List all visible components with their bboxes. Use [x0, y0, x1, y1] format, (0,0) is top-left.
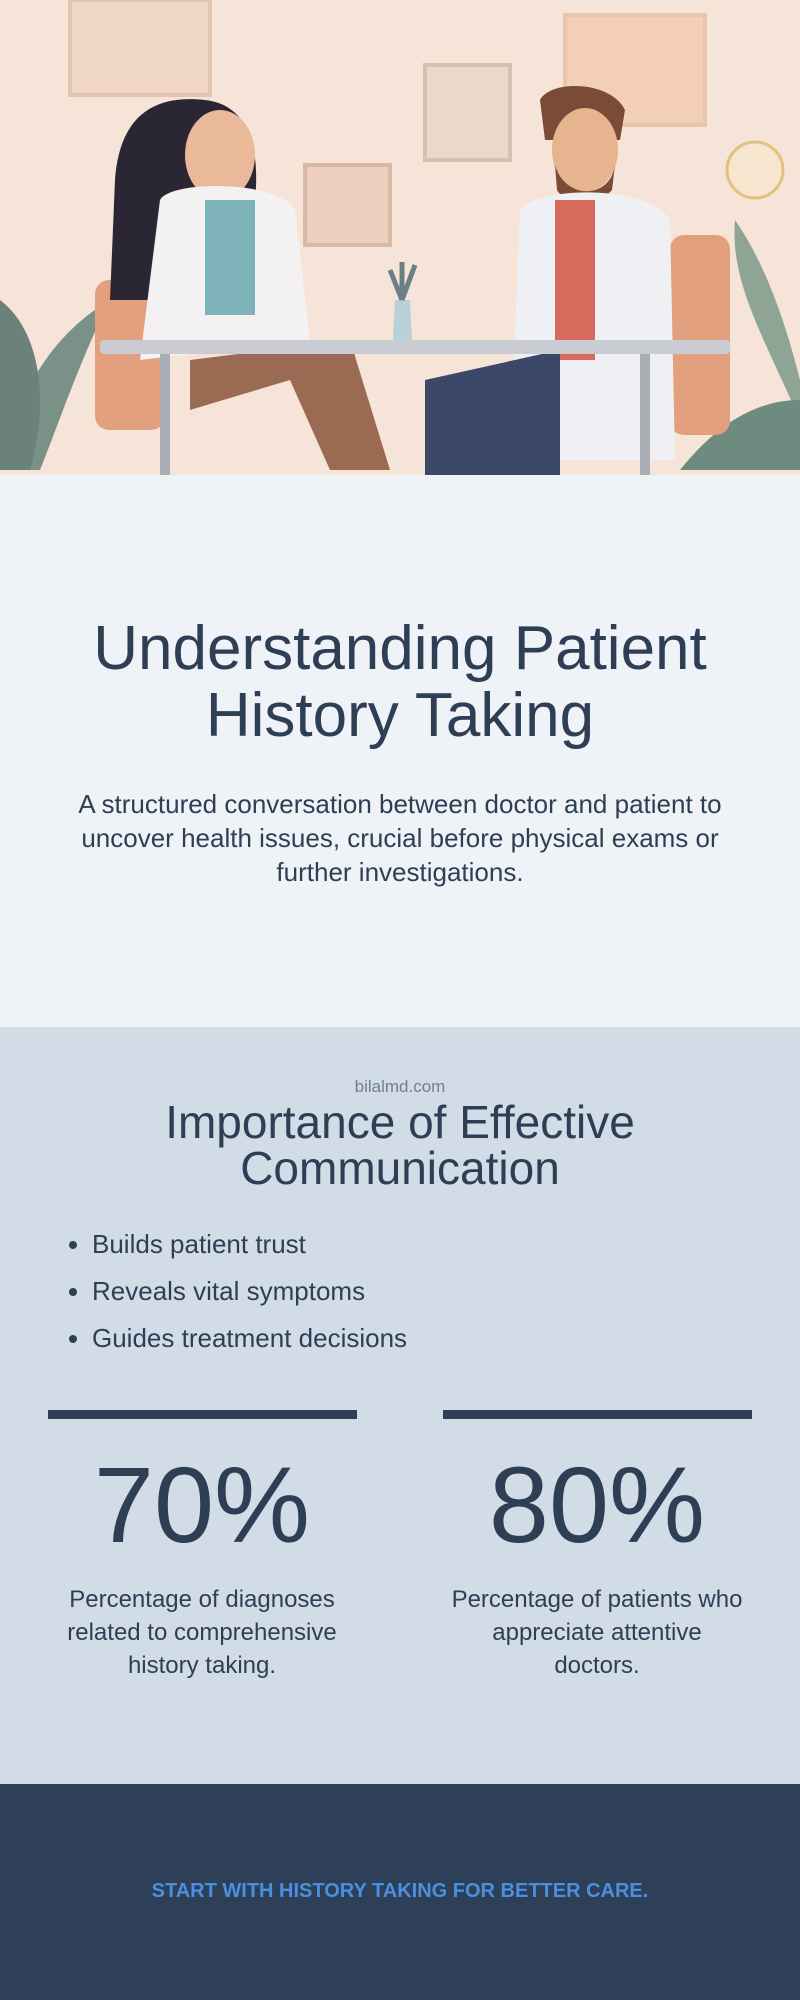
heading: Importance of Effective: [165, 1096, 635, 1148]
stat 70%: history taking.: [128, 1652, 276, 1679]
stat 80%: 80%: [489, 1444, 705, 1565]
stat 80%: Percentage of patients who: [452, 1586, 742, 1613]
site label: bilalmd.com: [355, 1077, 445, 1096]
subtitle: A structured conversation between doctor and patient to uncover health issues, crucial before physical exams or further investigations.: [78, 789, 722, 887]
stat 80%: doctors.: [554, 1652, 640, 1679]
bar left: [48, 1410, 357, 1419]
heading: [165, 1096, 635, 1194]
stat 70%: 70%: [94, 1444, 310, 1565]
footer: [0, 1784, 800, 2000]
title: [93, 614, 707, 750]
stat 70%: Percentage of diagnoses: [69, 1586, 335, 1613]
bullet list: Guides treatment decisions: [92, 1323, 407, 1353]
intro section: [0, 475, 800, 1027]
title: History Taking: [206, 681, 594, 750]
call to action: START WITH HISTORY TAKING FOR BETTER CARE.: [152, 1880, 648, 1902]
illustration: doctors at table: [0, 0, 800, 475]
bar right: [443, 1410, 752, 1419]
title: Understanding Patient: [93, 614, 707, 683]
bullet list: Reveals vital symptoms: [92, 1276, 365, 1306]
bullet list: [69, 1229, 407, 1353]
stat 80%: [452, 1444, 742, 1679]
stat 70%: related to comprehensive: [67, 1619, 337, 1646]
heading: Communication: [240, 1142, 560, 1194]
stat 70%: [67, 1444, 337, 1679]
bullet list: Builds patient trust: [92, 1229, 306, 1259]
panel: importance: [0, 1027, 800, 1784]
stat 80%: appreciate attentive: [492, 1619, 702, 1646]
